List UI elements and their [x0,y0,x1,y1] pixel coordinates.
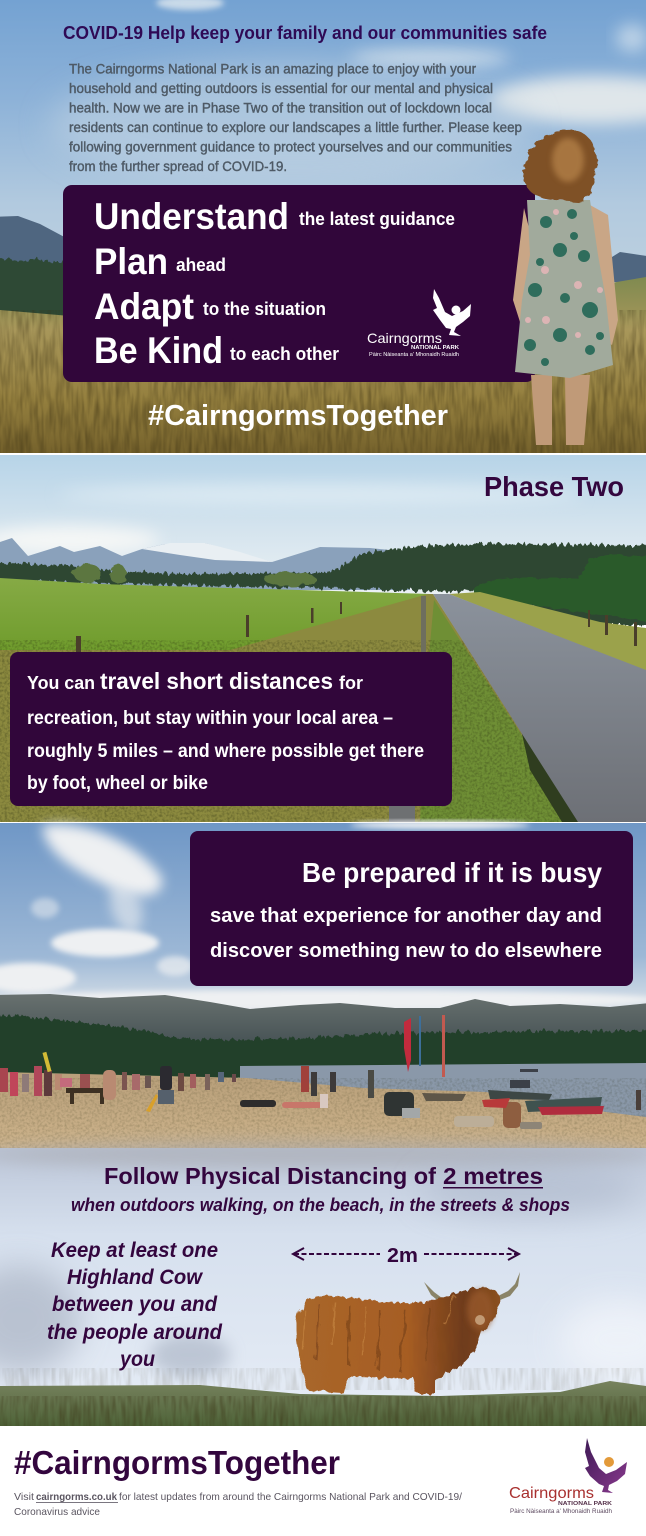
cow message: between you and [52,1293,218,1316]
cow message: Keep at least one [51,1239,218,1262]
footer note: Visit [14,1491,34,1503]
logo: Cairngorms National Park white: Cairngorms [367,330,442,346]
lake [240,1063,646,1120]
masts and flag [404,1015,445,1077]
guidance lines: to each other [230,344,339,364]
distant hills [0,216,646,282]
panel: Phase Two road scene [0,455,646,822]
travel message text: You can [27,673,95,693]
logo: Cairngorms National Park white: NATIONAL PARK [411,345,459,351]
footer note: cairngorms.co.uk [36,1491,117,1503]
sky background [0,1148,646,1398]
footer note [14,1491,462,1518]
busy message box [190,831,633,986]
busy message text: Be prepared if it is busy [302,857,602,888]
meadow [0,277,646,453]
footer background [0,1426,646,1536]
arrow: 2 metre span [293,1245,519,1267]
main heading: COVID-19 Help keep your family and our communities safe [63,23,547,43]
intro paragraph: following government guidance to protect yourselves and our communities [69,140,512,154]
beach [0,1072,646,1148]
travel message box [10,652,452,806]
cow message: the people around [47,1321,223,1344]
trees [73,564,316,586]
grass wisps [0,1368,646,1390]
road [433,594,646,822]
roadside shadow [520,725,578,822]
travel message text: for [339,673,363,693]
cow message: you [119,1348,155,1371]
boats [422,1090,604,1115]
fence posts [76,596,637,822]
intro paragraph [69,62,522,174]
busy message text: save that experience for another day and [210,905,602,927]
sky background [0,823,646,1013]
grassy hill [0,1381,646,1426]
mountains [0,538,410,590]
forest [0,258,70,318]
mountains [0,994,646,1050]
guidance lines: Be Kind [94,330,223,371]
guidance box [63,185,535,382]
distancing heading: Follow Physical Distancing of [104,1163,436,1189]
clouds [0,821,646,1010]
Highland cow [296,1272,520,1394]
logo: Cairngorms National Park colour: Pàirc Nàiseanta a' Mhonaidh Ruaidh [510,1509,612,1515]
forest [0,1012,646,1080]
cow message: Highland Cow [67,1266,204,1289]
guidance lines: the latest guidance [299,209,455,229]
crowd [0,1052,236,1096]
people on beach [0,1052,641,1129]
arrow: 2 metre span: 2m [387,1245,418,1267]
logo: Cairngorms National Park colour: Cairngorms [509,1485,594,1502]
distancing subheading: when outdoors walking, on the beach, in the streets & shops [71,1195,570,1215]
distancing heading: 2 metres [443,1163,543,1189]
far forest [0,544,646,625]
footer hashtag: #CairngormsTogether [14,1444,340,1481]
logo: Cairngorms National Park colour: NATIONAL PARK [558,1501,612,1507]
travel message text: by foot, wheel or bike [27,773,208,794]
phase heading: Phase Two [484,471,624,502]
clouds [0,1141,646,1380]
travel message text [27,668,424,794]
guidance lines: Plan [94,241,168,282]
roadside verge [0,594,580,822]
clouds [50,0,646,187]
intro paragraph: The Cairngorms National Park is an amazing place to enjoy with your [69,62,476,76]
hashtag: #CairngormsTogether [148,400,448,432]
intro paragraph: from the further spread of COVID-19. [69,159,287,174]
guidance lines: ahead [176,255,226,275]
logo: Cairngorms National Park white [367,289,471,358]
guidance lines [94,196,455,371]
illustration: girl in floral dress [513,130,618,445]
green field [0,578,430,652]
panel: intro with girl in meadow [0,0,646,453]
guidance lines: Adapt [94,286,194,327]
busy message text: discover something new to do elsewhere [210,940,602,962]
logo: Cairngorms National Park colour [509,1438,627,1515]
guidance lines: to the situation [203,299,326,319]
logo: Cairngorms National Park white: Pàirc Nàiseanta a' Mhonaidh Ruaidh [369,352,459,358]
footer note: for latest updates from around the Cairngorms National Park and COVID-19/ [119,1491,462,1503]
travel message text: recreation, but stay within your local area – [27,708,393,729]
guidance lines: Understand [94,196,289,237]
intro paragraph: household and getting outdoors is essential for our mental and physical [69,81,493,96]
footer note: Coronavirus advice [14,1506,100,1518]
panel: footer [0,1426,646,1536]
panel: busy beach scene [0,821,646,1148]
intro paragraph: health. Now we are in Phase Two of the transition out of lockdown local [69,100,492,116]
panel: physical distancing with Highland cow [0,1141,646,1426]
travel message text: travel short distances [100,668,333,694]
sky background [0,0,646,330]
intro paragraph: residents can continue to explore our landscapes a little further. Please keep [69,120,522,135]
busy message text [210,857,602,962]
right meadow [449,592,646,672]
travel message text: roughly 5 miles – and where possible get there [27,741,424,762]
cow message [47,1239,223,1371]
sky background [0,455,646,605]
